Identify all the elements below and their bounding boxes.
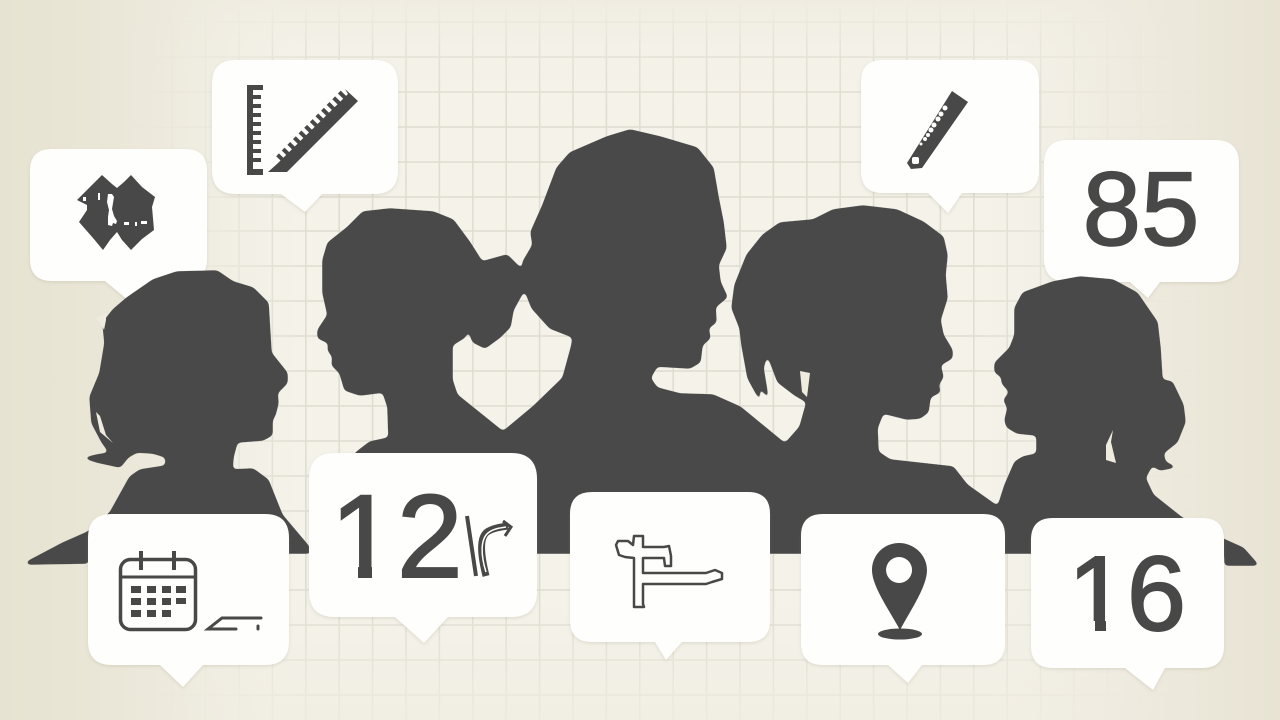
icon: scribble (208, 618, 261, 629)
icon: diagonal ruler (268, 89, 358, 172)
callout: number 85 bubble (1044, 140, 1239, 298)
hair gaps (96, 313, 1116, 463)
silhouette group body (27, 130, 1258, 565)
icon: bent arrow (467, 516, 511, 576)
silhouettes: five people in profile (27, 130, 1258, 565)
icon: outlined pipe tool (616, 536, 722, 607)
callout: blob icon bubble (30, 149, 207, 300)
icon: vertical ruler (247, 85, 263, 175)
callout: ruler and set square bubble (212, 60, 398, 212)
callout: calendar bubble (88, 514, 289, 687)
callout: number 16 bubble (1031, 518, 1224, 690)
number: 85: 85 (1083, 151, 1199, 268)
callout: slanted ruler bubble (861, 60, 1039, 213)
callout: number 12 bubble (309, 453, 537, 643)
icon: slanted ruler (907, 91, 968, 169)
icon: blob (77, 175, 155, 250)
number: 12: 12 (330, 471, 464, 603)
callout: location pin bubble (801, 514, 1005, 683)
icon: map pin (872, 543, 927, 640)
callout: tool outline bubble (570, 492, 770, 660)
number: 16: 16 (1068, 535, 1186, 653)
icon: calendar (120, 551, 196, 630)
